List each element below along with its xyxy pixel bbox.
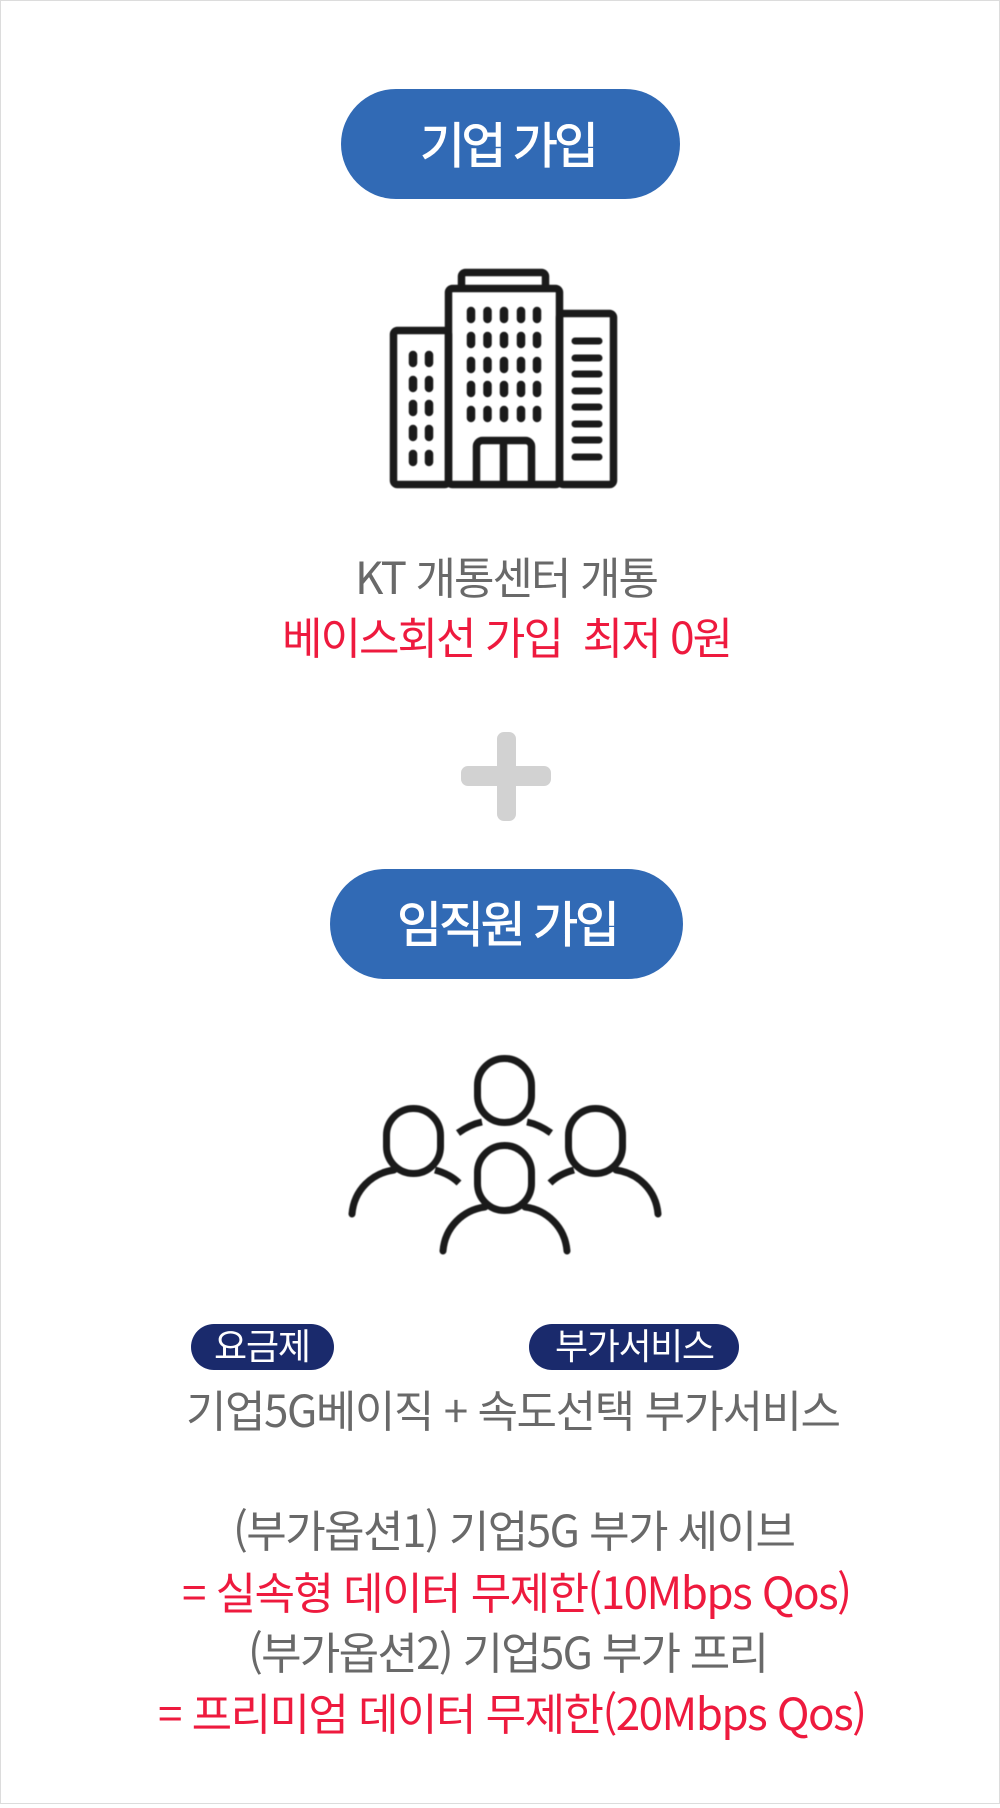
- text block: KT 개통: [282, 543, 733, 667]
- tag: 요금제: [191, 1318, 334, 1370]
- icon: plus sign: [461, 732, 551, 821]
- icon: office buildings: [394, 272, 614, 485]
- text block: 부가옵션 설명: = 실속형 데이터 무제한(10Mbps Qos): [182, 1558, 852, 1622]
- heading pill: 기업 가입: 기업 가입: [420, 107, 599, 178]
- text block: 부가옵션 설명: (부가옵션2) 기업5G 부가 프리: [248, 1618, 769, 1682]
- tag: 요금제: 요금제: [214, 1318, 311, 1370]
- heading pill: 임직원 가입: 임직원 가입: [397, 886, 620, 957]
- text block: KT 개통: KT 개통센터 개통: [355, 543, 659, 607]
- text block: 부가옵션 설명: [158, 1496, 867, 1743]
- text block: 부가옵션 설명: = 프리미엄 데이터 무제한(20Mbps Qos): [158, 1679, 867, 1743]
- text block: KT 개통: 베이스회선 가입 최저 0원: [282, 603, 733, 667]
- tag: 부가서비스: 부가서비스: [555, 1318, 715, 1370]
- heading pill: 임직원 가입: [330, 869, 683, 979]
- text block: 요금제 + 부가서비스: 기업5G베이직 + 속도선택 부가서비스: [186, 1376, 841, 1440]
- text block: 부가옵션 설명: (부가옵션1) 기업5G 부가 세이브: [233, 1496, 796, 1560]
- heading pill: 기업 가입: [341, 89, 680, 199]
- icon: group of people: [352, 1058, 658, 1251]
